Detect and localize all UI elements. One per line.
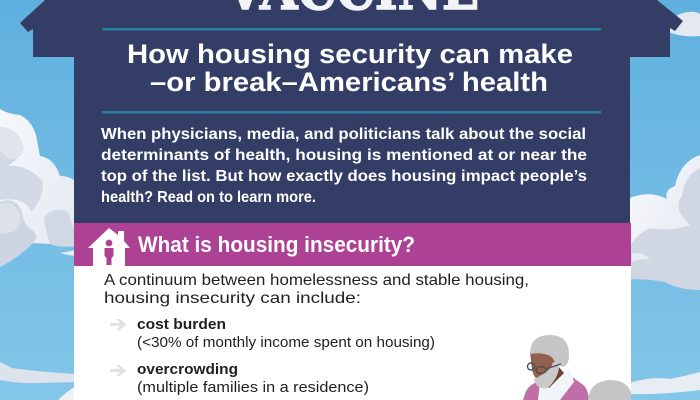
list item: cost burden bbox=[137, 316, 435, 351]
panel: what is housing insecurity bbox=[74, 223, 631, 400]
teal rule: upper bbox=[102, 28, 601, 30]
list item: overcrowding bbox=[137, 361, 369, 396]
definition text: housing insecurity can include: bbox=[104, 290, 361, 307]
subtitle: How housing security can make bbox=[127, 39, 573, 69]
subtitle bbox=[127, 39, 573, 97]
arrow: cost burden bbox=[110, 319, 126, 330]
teal rule: lower bbox=[102, 111, 601, 113]
cloud strip: bottom right bbox=[630, 372, 700, 394]
definition text bbox=[104, 272, 529, 307]
cloud: left bbox=[0, 109, 76, 267]
intro paragraph bbox=[101, 126, 587, 206]
list item: overcrowding: (multiple families in a residence) bbox=[137, 379, 369, 396]
section banner bbox=[74, 223, 631, 266]
intro paragraph: health? Read on to learn more. bbox=[101, 189, 316, 206]
subtitle: –or break–Americans’ health bbox=[150, 67, 548, 97]
cloud wisp: bottom left corner bbox=[58, 386, 76, 400]
intro paragraph: When physicians, media, and politicians talk about the social bbox=[101, 126, 586, 143]
definition text: A continuum between homelessness and stable housing, bbox=[104, 272, 529, 289]
icon: house with person bbox=[88, 228, 130, 266]
illustration: second person's grey hair bbox=[588, 380, 631, 400]
intro paragraph: top of the list. But how exactly does housing impact people’s bbox=[101, 168, 587, 185]
section heading: What is housing insecurity? bbox=[138, 232, 415, 257]
list item: overcrowding: overcrowding bbox=[137, 361, 238, 378]
cloud: right bbox=[630, 155, 700, 290]
house: navy roof and body bbox=[20, 0, 683, 224]
cloud: top right behind roof bbox=[664, 12, 700, 36]
panel background bbox=[74, 266, 631, 400]
intro paragraph: determinants of health, housing is mentioned at or near the bbox=[101, 147, 587, 164]
arrow: overcrowding bbox=[110, 365, 126, 376]
cloud strip: bottom left bbox=[0, 362, 76, 383]
list item: cost burden: cost burden bbox=[137, 316, 226, 333]
list item: cost burden: (<30% of monthly income spent on housing) bbox=[137, 334, 435, 351]
illustration: older man bbox=[523, 335, 589, 400]
